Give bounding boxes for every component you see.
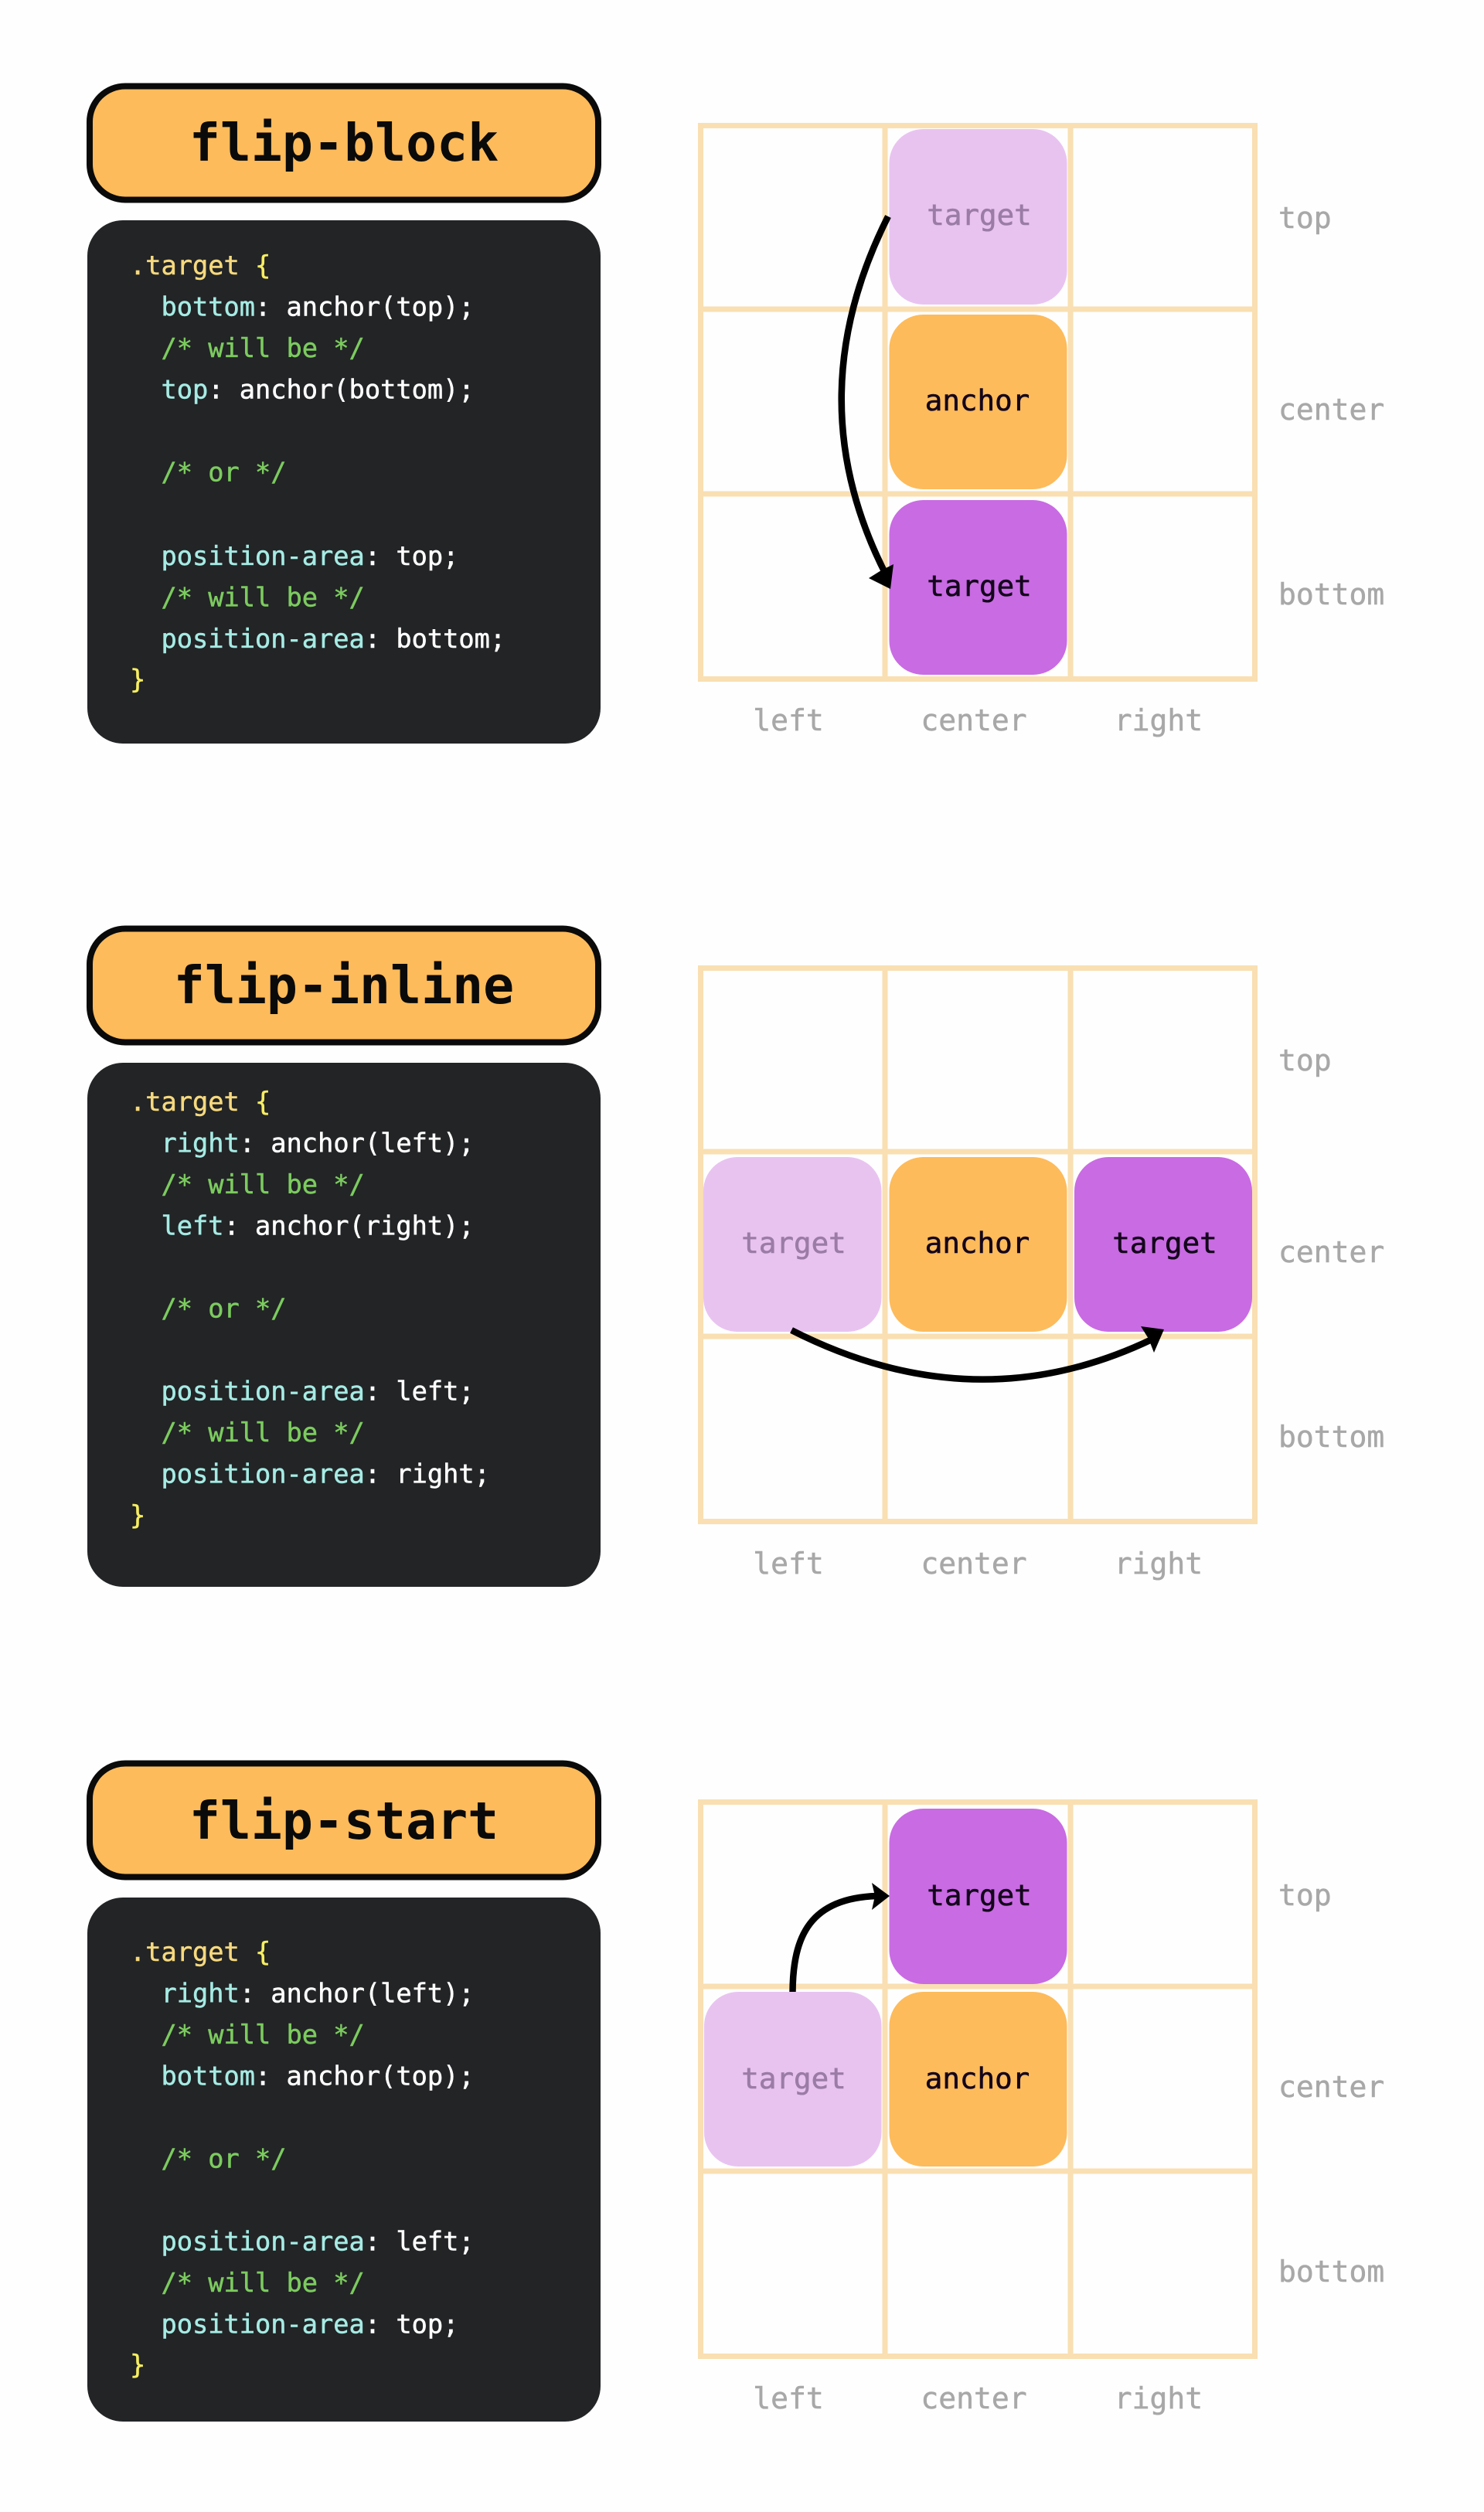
panel: flip-inline code: left: anchor(right); [130, 1210, 475, 1241]
panel: flip-inline code: .target { [130, 1087, 271, 1117]
arrow: top to bottom [842, 216, 893, 589]
box: anchor [889, 315, 1067, 489]
axis labels: flip-inline: right [1115, 1547, 1203, 1581]
title: flip-inline [90, 929, 598, 1042]
axis labels: flip-inline: center [921, 1547, 1027, 1581]
box: faded target top: target [927, 198, 1032, 232]
panel: flip-block code: /* or */ [130, 458, 287, 487]
panel: flip-block code: /* will be */ [130, 333, 365, 363]
panel: flip-start code: } [130, 2350, 145, 2380]
box: anchor: anchor [925, 2061, 1030, 2095]
axis labels: flip-block: top [1278, 201, 1332, 235]
axis labels: flip-inline: left [753, 1547, 824, 1581]
chart: flip-start position grid [700, 1802, 1255, 2356]
panel: flip-inline code: right: anchor(left); [130, 1128, 475, 1158]
box: target right: target [1112, 1226, 1217, 1260]
axis labels: flip-block: center [1278, 393, 1384, 427]
title: flip-start: flip-start [189, 1791, 499, 1851]
panel: flip-inline code: /* or */ [130, 1294, 287, 1323]
axis labels: flip-inline: bottom [1278, 1420, 1384, 1454]
panel: flip-start code: /* or */ [130, 2144, 287, 2173]
arrow: left to top [793, 1883, 890, 1992]
axis labels: flip-block [753, 201, 1384, 737]
box: faded target left [704, 1992, 881, 2167]
title: flip-block: flip-block [189, 113, 499, 173]
axis labels: flip-start [753, 1878, 1384, 2415]
title: flip-block [90, 87, 598, 199]
box: target right [1074, 1157, 1252, 1332]
axis labels: flip-block: left [753, 703, 824, 737]
panel: flip-start code: position-area: top; [130, 2309, 458, 2339]
axis labels: flip-block: right [1115, 703, 1203, 737]
axis labels: flip-block: center [921, 703, 1027, 737]
axis labels: flip-inline [753, 1043, 1384, 1581]
title: flip-start [90, 1764, 598, 1877]
panel: flip-block code [87, 220, 601, 744]
panel: flip-inline code: /* will be */ [130, 1418, 365, 1448]
box: faded target top [889, 129, 1067, 305]
panel: flip-inline code: position-area: left; [130, 1376, 475, 1407]
panel: flip-start code: .target { [130, 1937, 271, 1967]
panel: flip-inline code: /* will be */ [130, 1169, 365, 1200]
panel: flip-start code: /* will be */ [130, 2268, 365, 2298]
section: flip-start [87, 1764, 1384, 2422]
axis labels: flip-start: right [1115, 2381, 1203, 2415]
axis labels: flip-start: center [921, 2381, 1027, 2415]
box: target bottom [889, 500, 1067, 675]
arrow: left to right [791, 1326, 1164, 1380]
axis labels: flip-start: center [1278, 2070, 1384, 2104]
panel: flip-inline code: } [130, 1500, 145, 1530]
box: faded target left: target [741, 1226, 846, 1260]
panel: flip-start code: position-area: left; [130, 2226, 475, 2257]
box: anchor [889, 1992, 1067, 2167]
panel: flip-block code: /* will be */ [130, 583, 365, 612]
axis labels: flip-start: left [753, 2381, 824, 2415]
chart: flip-inline position grid [700, 968, 1255, 1521]
section: flip-inline [87, 929, 1384, 1587]
panel: flip-block code: bottom: anchor(top); [130, 292, 475, 322]
panel: flip-start code: /* will be */ [130, 2020, 365, 2050]
chart: flip-block position grid [700, 125, 1255, 679]
title: flip-inline: flip-inline [174, 955, 514, 1016]
panel: flip-inline code [87, 1063, 601, 1587]
panel: flip-inline code: position-area: right; [130, 1459, 490, 1489]
box: anchor: anchor [925, 1226, 1030, 1260]
section: flip-block [87, 87, 1384, 744]
box: faded target left: target [741, 2061, 846, 2095]
panel: flip-start code [87, 1898, 601, 2422]
panel: flip-start code: bottom: anchor(top); [130, 2061, 475, 2092]
panel: flip-block code: top: anchor(bottom); [130, 374, 475, 405]
box: target top [889, 1809, 1067, 1984]
box: target top: target [927, 1878, 1032, 1912]
axis labels: flip-inline: top [1278, 1043, 1332, 1077]
box: anchor: anchor [925, 383, 1030, 417]
panel: flip-block code: } [130, 665, 145, 694]
panel: flip-block code: position-area: top; [130, 541, 458, 571]
box: target bottom: target [927, 569, 1032, 603]
axis labels: flip-start: bottom [1278, 2255, 1384, 2289]
panel: flip-start code: right: anchor(left); [130, 1979, 475, 2008]
axis labels: flip-inline: center [1278, 1235, 1384, 1269]
box: anchor [889, 1157, 1067, 1332]
axis labels: flip-start: top [1278, 1878, 1332, 1912]
panel: flip-block code: .target { [130, 250, 271, 281]
panel: flip-block code: position-area: bottom; [130, 624, 505, 654]
axis labels: flip-block: bottom [1278, 577, 1384, 611]
box: faded target left [703, 1157, 881, 1332]
